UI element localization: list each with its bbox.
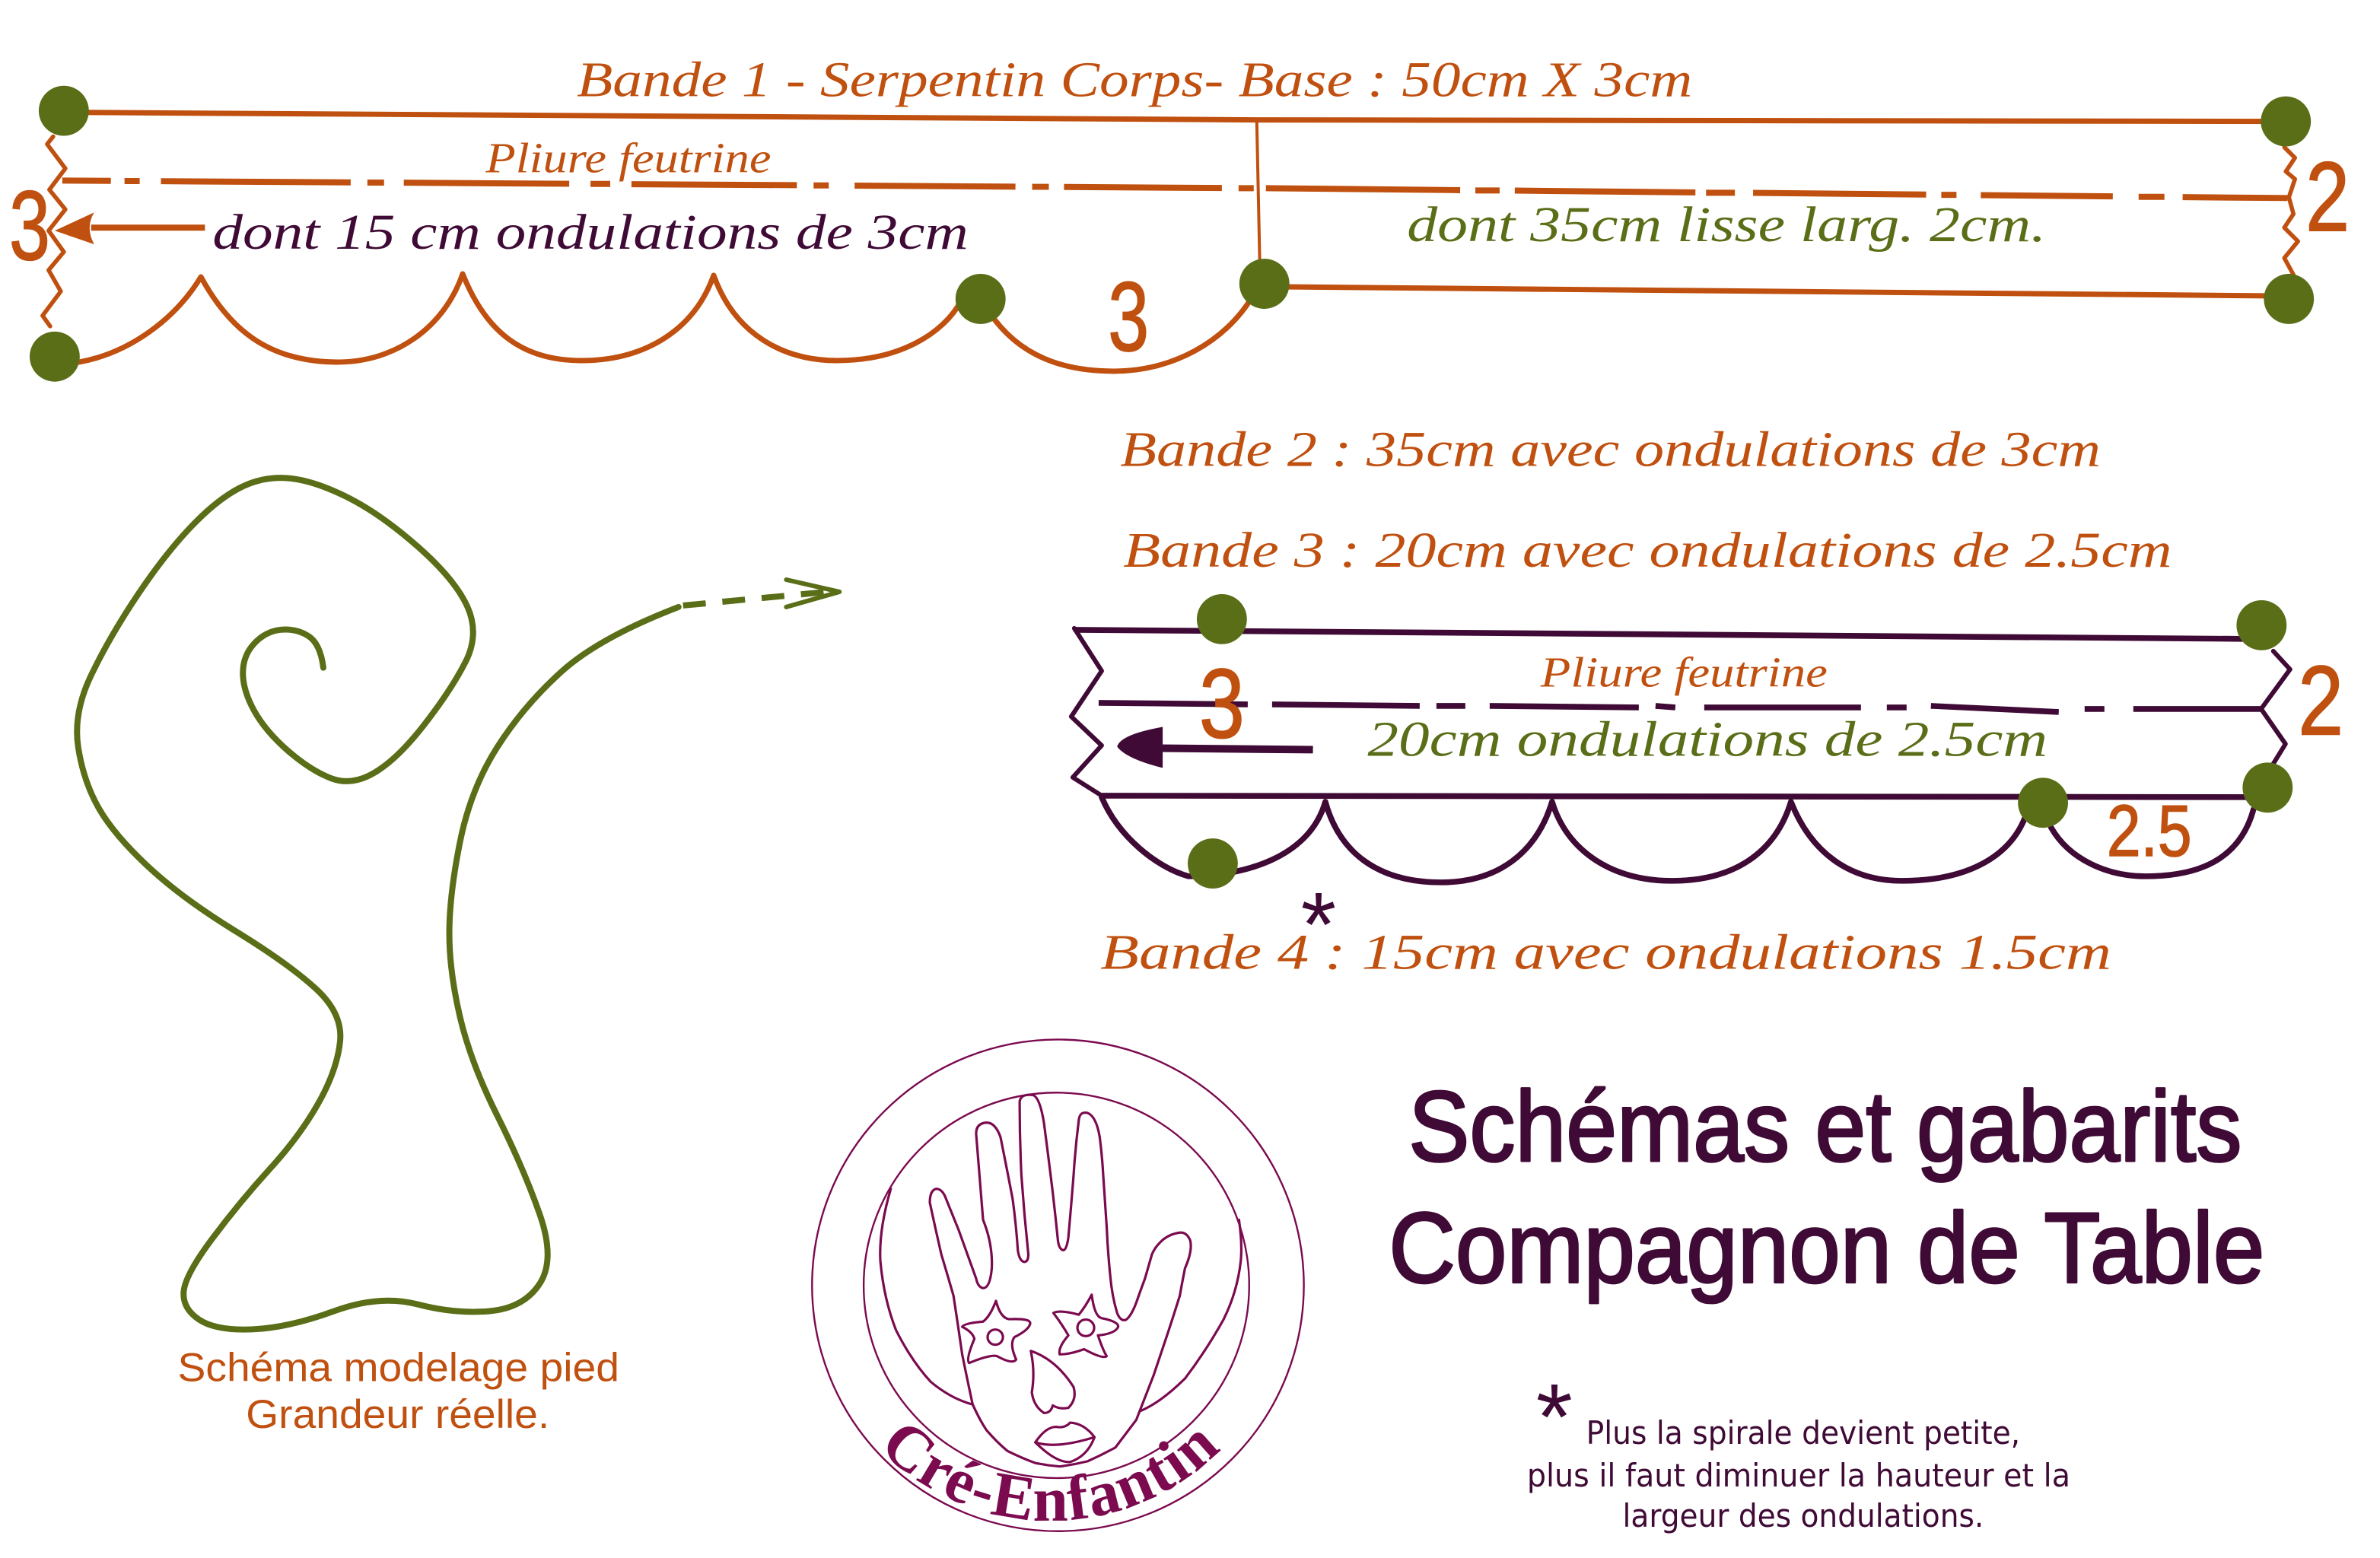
- dimension: 2.5: 2.5: [2107, 790, 2192, 872]
- footnote: largeur des ondulations.: [1623, 1497, 1984, 1534]
- dimension: 3: 3: [1199, 649, 1245, 758]
- caption: schema modelage pied: Grandeur réelle.: [246, 1392, 549, 1437]
- caption: schema modelage pied: Schéma modelage pied: [177, 1345, 619, 1390]
- arrow: ondulations: [55, 212, 205, 244]
- heading: bande 4: Bande 4 : 15cm avec ondulations 1.5cm: [1100, 925, 2111, 981]
- footnote: plus il faut diminuer la hauteur et la: [1527, 1457, 2070, 1494]
- logo: Cré-Enfantin: [811, 1038, 1305, 1532]
- heading: bande 4: [1100, 875, 2111, 981]
- marker dots: [30, 86, 2314, 382]
- logo circles: [812, 1039, 1304, 1531]
- label: 20cm ondulations: 20cm ondulations de 2.5cm: [1367, 711, 2048, 767]
- footnote: *: [1536, 1365, 1573, 1470]
- logo lettering: Cré-Enfantin: [887, 1426, 1221, 1521]
- heading: bande 2: Bande 2 : 35cm avec ondulations de 3cm: [1120, 421, 2101, 477]
- bande 1 outline: [43, 113, 2298, 371]
- label: dont 35cm: dont 35cm lisse larg. 2cm.: [1407, 197, 2046, 253]
- heading: bande 4: *: [1301, 875, 1336, 976]
- label: pliure feutrine: Pliure feutrine: [485, 135, 771, 182]
- footnote: [1527, 1365, 2070, 1534]
- dimension: left 3: 3: [9, 171, 50, 281]
- arrow: ondulations: [1117, 727, 1313, 768]
- marker dots: [1188, 594, 2292, 889]
- heading: bande 3: Bande 3 : 20cm avec ondulations de 2.5cm: [1123, 523, 2172, 578]
- diagram: bande 1: [9, 52, 2350, 382]
- title: [1389, 1070, 2264, 1304]
- heading: bande 1: Bande 1 - Serpentin Corps- Base : 50cm X 3cm: [577, 52, 1692, 108]
- bande 3 outline: [1071, 628, 2290, 882]
- title: Schémas et gabarits: [1408, 1070, 2242, 1182]
- label: pliure feutrine: Pliure feutrine: [1540, 650, 1828, 697]
- dimension: right 2: 2: [2305, 142, 2350, 252]
- footnote: Plus la spirale devient petite,: [1586, 1414, 2020, 1451]
- title: Compagnon de Table: [1389, 1192, 2264, 1304]
- label: dont 15 cm: dont 15 cm ondulations de 3cm: [212, 205, 969, 260]
- dimension: scallop 3: 3: [1108, 262, 1149, 372]
- icon: hand with face: [880, 1095, 1241, 1467]
- diagram: bande 3: [1071, 594, 2343, 889]
- dimension: 2: 2: [2298, 646, 2343, 755]
- caption: schema modelage pied: [177, 1345, 619, 1437]
- schema: foot spiral: [77, 478, 839, 1330]
